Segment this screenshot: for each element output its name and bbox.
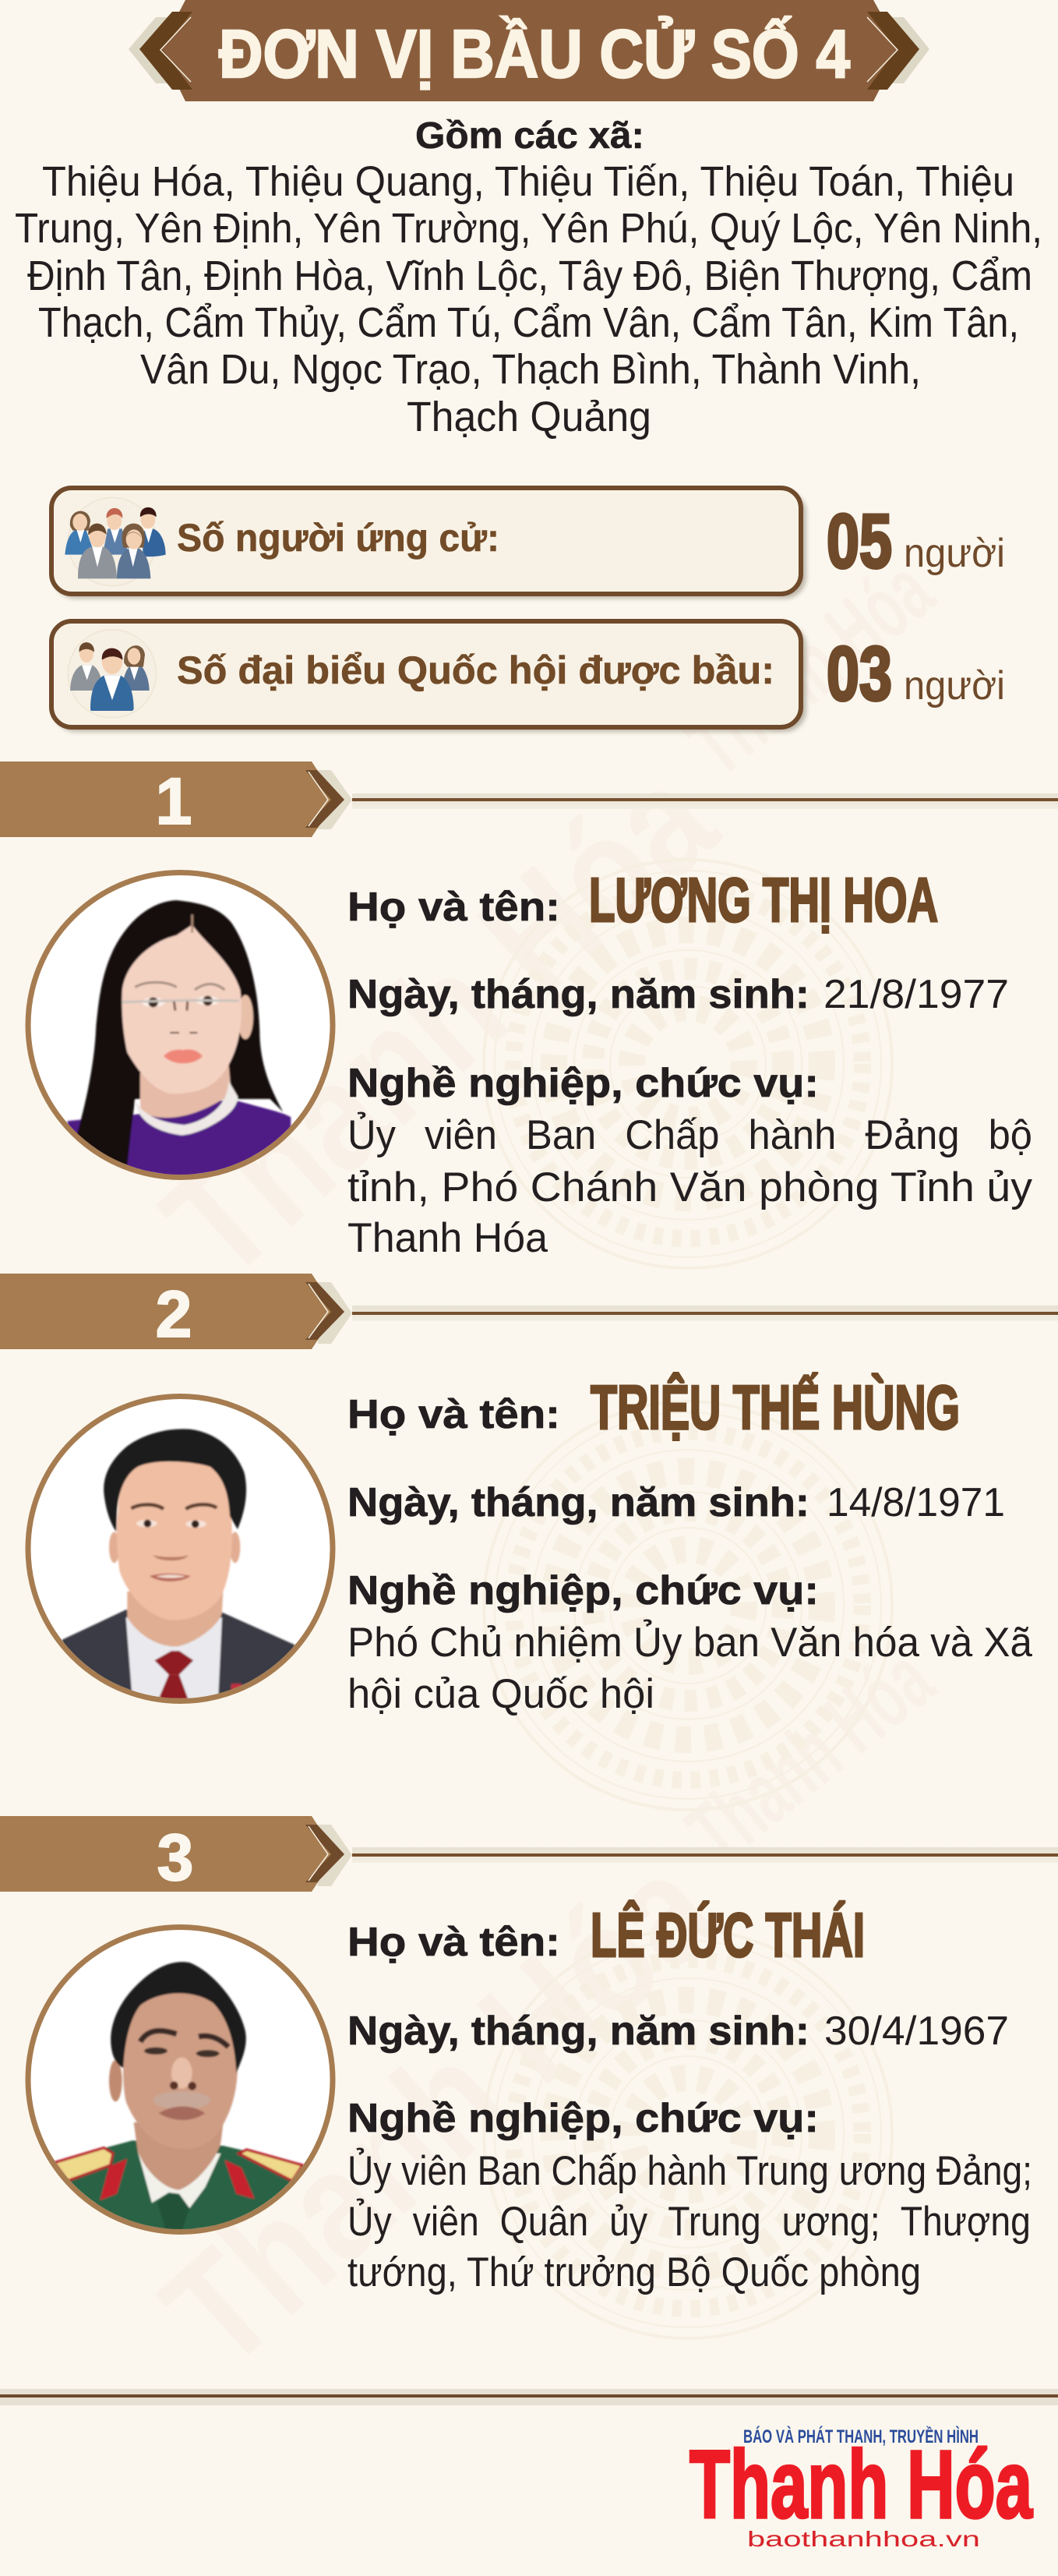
ribbon number 3 — [0, 1816, 1058, 1894]
watermark: bronze drum 3 — [484, 1930, 892, 2338]
name row: Họ và tên: — [347, 1392, 560, 1437]
name row — [347, 1373, 960, 1442]
ribbon number 2 — [0, 1274, 1058, 1351]
occupation block: Phó Chủ nhiệm Ủy ban Văn hóa và Xã — [347, 1619, 1033, 1666]
birth date row: 21/8/1977 — [823, 972, 1009, 1017]
occupation block: tướng, Thứ trưởng Bộ Quốc phòng — [347, 2249, 921, 2295]
footer divider — [0, 2389, 1058, 2405]
panel: deputies to be elected — [51, 621, 806, 732]
title banner — [129, 0, 929, 101]
count: 03 deputies: 03 — [827, 631, 892, 716]
count: 05 candidates — [827, 498, 1005, 584]
title banner: ĐƠN VỊ BẦU CỬ SỐ 4 — [219, 16, 850, 92]
count: 05 candidates: người — [904, 531, 1005, 576]
birth date row: 30/4/1967 — [824, 2009, 1009, 2054]
occupation block — [347, 2096, 1032, 2295]
occupation block: Nghề nghiệp, chức vụ: — [347, 1568, 819, 1613]
portrait 3 — [28, 1927, 333, 2257]
panel: candidate 1 — [0, 761, 1058, 1261]
ribbon number 1 — [0, 761, 1058, 838]
watermarks: Thanh Hóa diagonal — [132, 539, 951, 2400]
name row — [347, 1900, 865, 1970]
count: 03 deputies — [827, 631, 1005, 716]
watermark: bronze drum 2 — [484, 1401, 892, 1810]
ribbon number 3: 3 — [157, 1821, 193, 1894]
commune list: Gồm các xã: — [415, 115, 644, 157]
occupation block: Thanh Hóa — [347, 1215, 548, 1261]
ribbon number 2: 2 — [156, 1277, 192, 1351]
label: number of candidates: Số người ứng cử: — [177, 516, 499, 560]
commune list: Thiệu Hóa, Thiệu Quang, Thiệu Tiến, Thiệu Toán, Thiệu — [42, 158, 1014, 205]
panel: candidate 2 — [0, 1274, 1058, 1726]
icon: five candidates — [65, 497, 166, 586]
commune list: Vân Du, Ngọc Trạo, Thạch Bình, Thành Vinh, — [140, 346, 921, 393]
birth date row: Ngày, tháng, năm sinh: — [347, 972, 809, 1017]
commune list: Thạch Quảng — [407, 394, 651, 440]
occupation block — [347, 1061, 1033, 1261]
birth date row: 14/8/1971 — [827, 1480, 1005, 1525]
occupation block: tỉnh, Phó Chánh Văn phòng Tỉnh ủy — [347, 1164, 1033, 1210]
name row — [347, 865, 938, 935]
ribbon number 1: 1 — [156, 765, 192, 838]
panel: candidate 3 — [0, 1816, 1058, 2295]
logo: Thanh Hóa newspaper: baothanhhoa.vn — [747, 2527, 980, 2551]
panel: number of candidates — [51, 488, 806, 599]
count: 05 candidates: 05 — [827, 498, 892, 584]
watermark: bronze drum 1 — [484, 860, 892, 1268]
name row: Họ và tên: — [347, 885, 560, 930]
label: deputies to be elected: Số đại biểu Quốc hội được bầu: — [177, 648, 774, 692]
occupation block: Ủy viên Ban Chấp hành Đảng bộ — [347, 1111, 1032, 1158]
portrait 1 — [28, 873, 333, 1203]
portrait 2 — [28, 1397, 333, 1726]
birth date row — [347, 2009, 1009, 2054]
watermarks: Thanh Hóa diagonal: Thanh Hóa — [132, 1822, 747, 2400]
birth date row — [347, 1480, 1005, 1525]
occupation block: hội của Quốc hội — [347, 1671, 654, 1717]
occupation block — [347, 1568, 1033, 1717]
name row: LÊ ĐỨC THÁI — [591, 1900, 865, 1970]
occupation block: Nghề nghiệp, chức vụ: — [347, 2096, 819, 2141]
count: 03 deputies: người — [904, 663, 1005, 708]
name row: Họ và tên: — [347, 1920, 560, 1965]
birth date row — [347, 972, 1009, 1017]
birth date row: Ngày, tháng, năm sinh: — [347, 1480, 809, 1525]
icon: three deputies — [68, 630, 157, 718]
watermarks: Thanh Hóa diagonal: Thanh Hóa — [132, 733, 747, 1311]
commune list — [15, 115, 1042, 440]
occupation block: Nghề nghiệp, chức vụ: — [347, 1061, 819, 1106]
birth date row: Ngày, tháng, năm sinh: — [347, 2009, 809, 2054]
